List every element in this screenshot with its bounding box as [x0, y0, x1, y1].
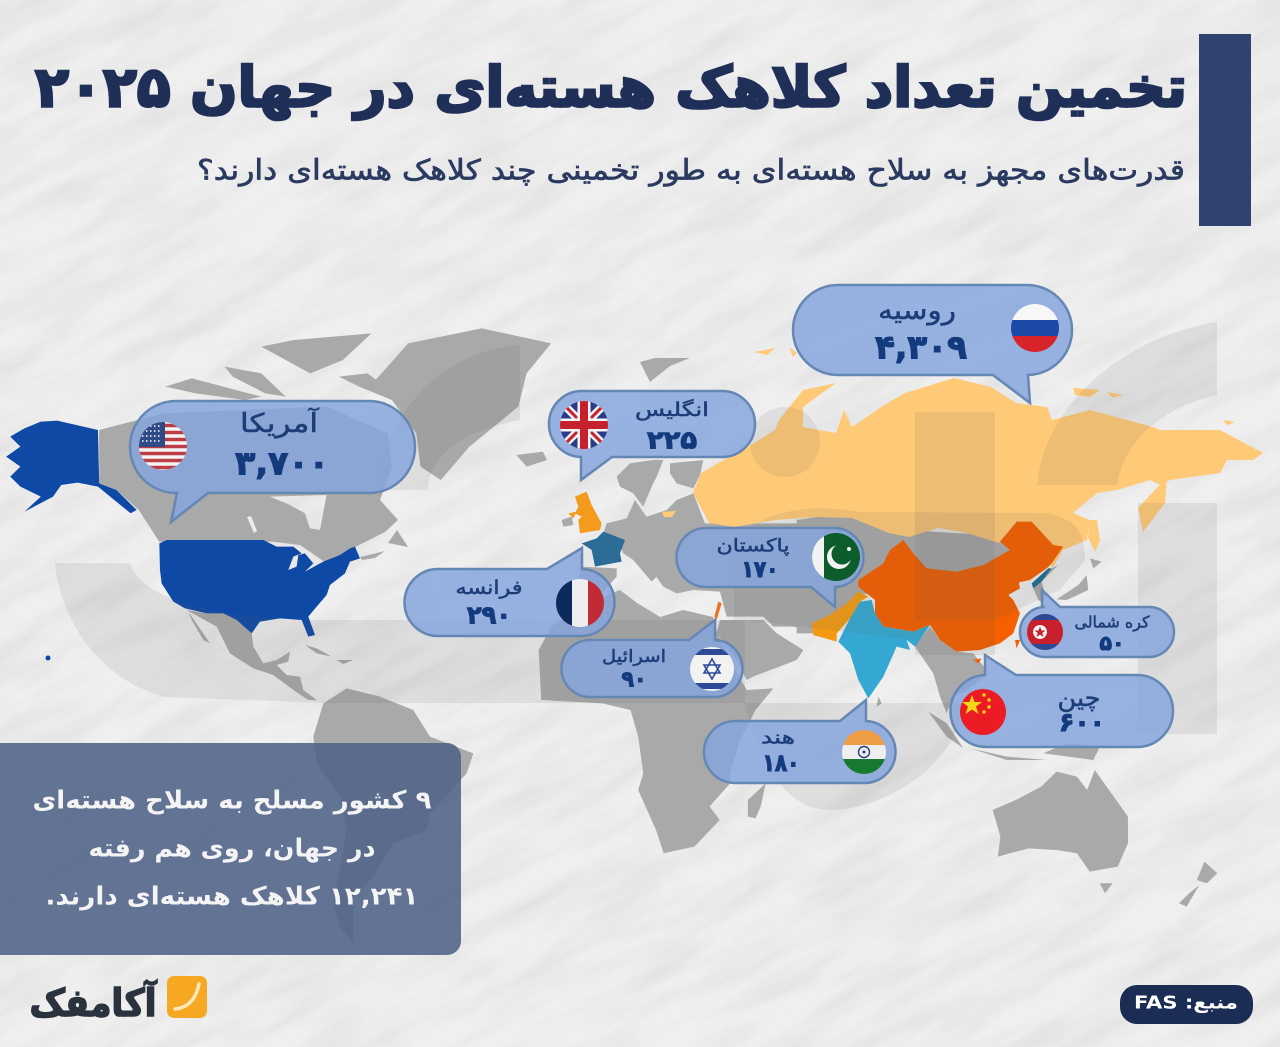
label: Russia: روسیه: [878, 296, 956, 326]
land: Iceland: [516, 452, 547, 467]
land: South America: [313, 688, 473, 943]
land: Africa: [539, 590, 773, 853]
flag: France: [556, 579, 604, 627]
logo: [30, 976, 207, 1025]
country: France: [582, 532, 625, 567]
land: Newfoundland and Nova Scotia: [360, 530, 408, 560]
label: India: هند: [761, 728, 795, 748]
label: China: چین: [1058, 684, 1100, 712]
watermark: left quarter ring: [378, 345, 520, 490]
land: Indochina: [915, 627, 987, 713]
title: تخمین تعداد کلاهک هسته‌ای در جهان ۲۰۲۵: [35, 56, 1187, 120]
subtitle: قدرت‌های مجهز به سلاح هسته‌ای به طور تخمینی چند کلاهک هسته‌ای دارند؟: [197, 154, 1185, 186]
land: Lake Winnipeg: [247, 516, 257, 533]
watermark: right quarter ring: [1037, 322, 1217, 485]
callout: India: [704, 700, 896, 783]
value: Russia: ۴,۳۰۹: [875, 328, 967, 366]
country: Hawaii: [46, 656, 50, 660]
country: Pakistan: [812, 592, 868, 642]
callout: UK: [549, 391, 755, 480]
land: Ireland: [562, 517, 573, 527]
label: North Korea: کره شمالی: [1074, 612, 1150, 632]
label: Israel: اسرائیل: [602, 647, 666, 667]
flag: Russia: [1011, 304, 1059, 352]
land: Central Asia and Mongolia: [797, 513, 1013, 633]
label: Pakistan: پاکستان: [716, 536, 790, 556]
callout: Israel: [562, 620, 743, 697]
watermark: dot: [750, 407, 820, 477]
flag: UK: [560, 401, 608, 449]
value: UK: ۲۲۵: [647, 426, 697, 454]
watermark: dome: [734, 508, 1085, 640]
land: Europe and Middle East: [603, 493, 820, 632]
value: India: ۱۸۰: [762, 749, 800, 777]
logo wordmark: آکامفک: [30, 979, 157, 1025]
source text: منبع: FAS: [1134, 992, 1238, 1014]
callout: North Korea: [1020, 590, 1174, 657]
label: USA: آمریکا: [240, 407, 320, 439]
watermark: central bar: [915, 412, 995, 655]
callout: USA: [130, 401, 415, 522]
land: Australia: [993, 770, 1128, 872]
info panel: [0, 743, 461, 955]
land: Canada: [99, 407, 398, 563]
flag: China: [960, 689, 1006, 735]
watermark: right column: [1138, 503, 1217, 734]
land: Svalbard: [640, 358, 690, 382]
logo icon: [167, 976, 207, 1018]
land: Mexico and Central America: [187, 610, 317, 700]
land: Sri Lanka: [877, 697, 882, 707]
callout: Pakistan: [676, 528, 864, 607]
land: Spain: [578, 567, 617, 593]
value: Israel: ۹۰: [622, 668, 646, 692]
value: France: ۲۹۰: [467, 600, 511, 630]
land: Greenland: [376, 328, 551, 480]
world map: grey land: [99, 328, 1217, 943]
land: Scandinavia: [617, 460, 703, 507]
country: India: [838, 600, 930, 698]
country: Alaska: [6, 421, 137, 513]
country: Israel: [714, 602, 722, 620]
land: Madagascar: [748, 783, 766, 818]
value: North Korea: ۵۰: [1100, 631, 1124, 655]
country: North Korea: [1032, 568, 1052, 588]
land: Arctic islands: [165, 333, 404, 400]
country: China: [858, 522, 1063, 663]
watermark: lower arc: [55, 563, 745, 703]
highlighted countries: [6, 347, 1263, 698]
value: China: ۶۰۰: [1059, 708, 1105, 738]
callout: France: [404, 548, 614, 636]
flag: USA: [139, 422, 187, 470]
value: Pakistan: ۱۷۰: [742, 557, 778, 583]
land: Arabia: [717, 620, 803, 680]
flag: Israel: [690, 647, 734, 691]
value: USA: ۳,۷۰۰: [235, 444, 329, 482]
country: Russia: [662, 347, 1263, 567]
country: USA: [159, 540, 360, 637]
land: New Zealand and Tasmania: [1100, 862, 1217, 907]
callout: China: [950, 655, 1173, 747]
title accent bar: [1199, 34, 1251, 226]
land: Malaysia, Sumatra and Java: [928, 712, 1100, 760]
land: Cuba and Hispaniola: [305, 645, 353, 664]
callout: Russia: [793, 285, 1072, 403]
panel text: line 3: ۱۲,۲۴۱ کلاهک هسته‌ای دارند.: [46, 882, 418, 910]
flag: Pakistan: [812, 533, 860, 581]
flag: North Korea: [1027, 614, 1063, 650]
source badge: [1120, 985, 1253, 1024]
label: UK: انگلیس: [635, 398, 709, 421]
flag: India: [842, 730, 886, 774]
faded logo watermark: [55, 322, 1217, 810]
panel text: line 2: در جهان، روی هم رفته: [88, 834, 376, 864]
country: UK: [568, 492, 602, 533]
label: France: فرانسه: [456, 577, 522, 599]
watermark: bowl: [745, 703, 965, 810]
panel text: line 1: ۹ کشور مسلح به سلاح هسته‌ای: [32, 786, 431, 816]
land: Korea and Japan: [1033, 558, 1102, 603]
